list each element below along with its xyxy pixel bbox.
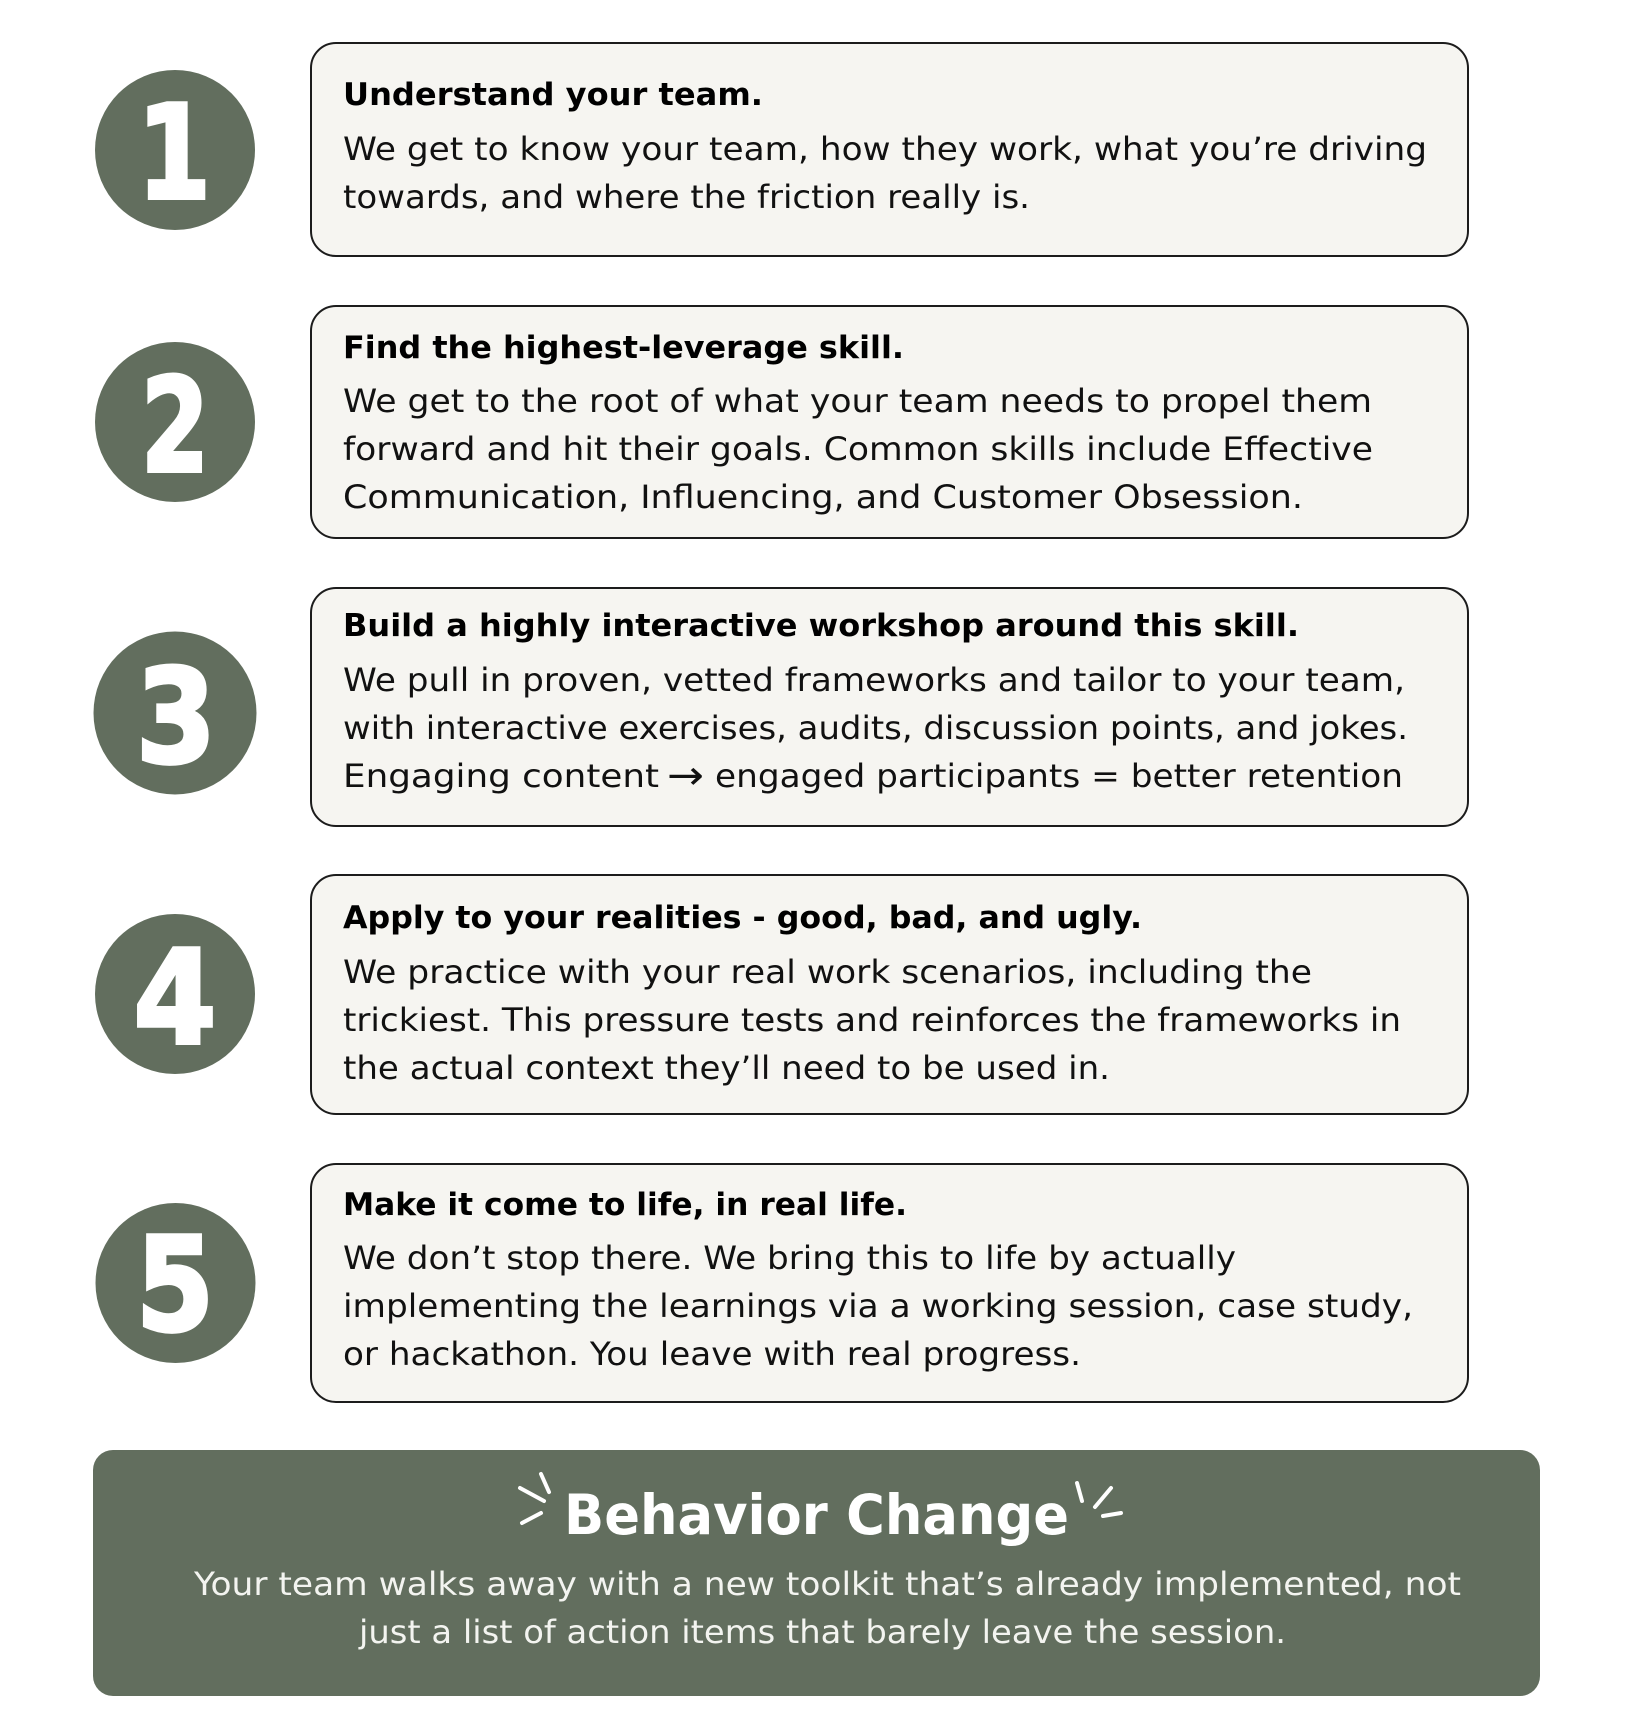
step 5 number badge (96, 1203, 256, 1363)
text block: step 5: or hackathon. You leave with real progress. (343, 1335, 1081, 1373)
panel: step 2 (311, 306, 1468, 538)
heading: step 5: Make it come to life, in real life. (343, 1187, 907, 1223)
text block: step 4: We practice with your real work scenarios, including the (343, 953, 1312, 991)
text block: banner description: just a list of action items that barely leave the session. (358, 1613, 1286, 1651)
heading: step 4: Apply to your realities - good, bad, and ugly. (343, 900, 1142, 936)
text block: step 5: We don’t stop there. We bring this to life by actually (343, 1239, 1236, 1277)
text block: step 4: the actual context they’ll need to be used in. (343, 1049, 1110, 1087)
step 4 number badge (95, 914, 255, 1074)
text block: step 3: engaged participants = better retention (715, 757, 1403, 795)
step 2 number badge: 2 (141, 350, 209, 502)
text block: step 1 (343, 130, 1427, 216)
step 3 number badge: 3 (136, 641, 216, 793)
text block: step 4: trickiest. This pressure tests and reinforces the frameworks in (343, 1001, 1401, 1039)
arrow: → (667, 753, 704, 799)
text block: step 3: We pull in proven, vetted frameworks and tailor to your team, (343, 661, 1405, 699)
text block: step 2: Communication, Influencing, and Customer Obsession. (343, 478, 1303, 516)
text block: step 1: towards, and where the friction really is. (343, 178, 1030, 216)
text block: step 2: forward and hit their goals. Common skills include Effective (343, 430, 1373, 468)
icon: right sparkle (1077, 1483, 1121, 1516)
panel: step 5 (311, 1164, 1468, 1402)
text block: banner description: Your team walks away with a new toolkit that’s already implemented, not (193, 1565, 1461, 1603)
panel: Behavior Change banner (93, 1450, 1540, 1696)
step 1 number badge (95, 70, 255, 230)
step 3 number badge (94, 632, 256, 794)
heading: Behavior Change: Behavior Change (564, 1483, 1069, 1547)
text block: step 1: We get to know your team, how they work, what you’re driving (343, 130, 1427, 168)
text block: step 2 (343, 382, 1373, 516)
heading: step 3: Build a highly interactive workshop around this skill. (343, 608, 1299, 644)
text block: step 2: We get to the root of what your team needs to propel them (343, 382, 1372, 420)
text block: step 3: Engaging content (343, 757, 659, 795)
text block: step 3 (343, 661, 1408, 799)
icon: left sparkle (520, 1474, 549, 1523)
step 2 number badge (95, 342, 255, 502)
panel: step 3 (311, 588, 1468, 826)
text block: step 3: with interactive exercises, audits, discussion points, and jokes. (343, 709, 1408, 747)
step 4 number badge: 4 (134, 922, 216, 1074)
panel: step 4 (311, 875, 1468, 1114)
text block: banner description (193, 1565, 1461, 1651)
text block: step 5: implementing the learnings via a working session, case study, (343, 1287, 1413, 1325)
text block: step 5 (343, 1239, 1413, 1373)
step 5 number badge: 5 (136, 1209, 214, 1361)
heading: step 2: Find the highest-leverage skill. (343, 330, 904, 366)
step 1 number badge: 1 (137, 77, 211, 229)
text block: step 4 (343, 953, 1401, 1087)
heading: step 1: Understand your team. (343, 77, 763, 113)
panel: step 1 (311, 43, 1468, 256)
